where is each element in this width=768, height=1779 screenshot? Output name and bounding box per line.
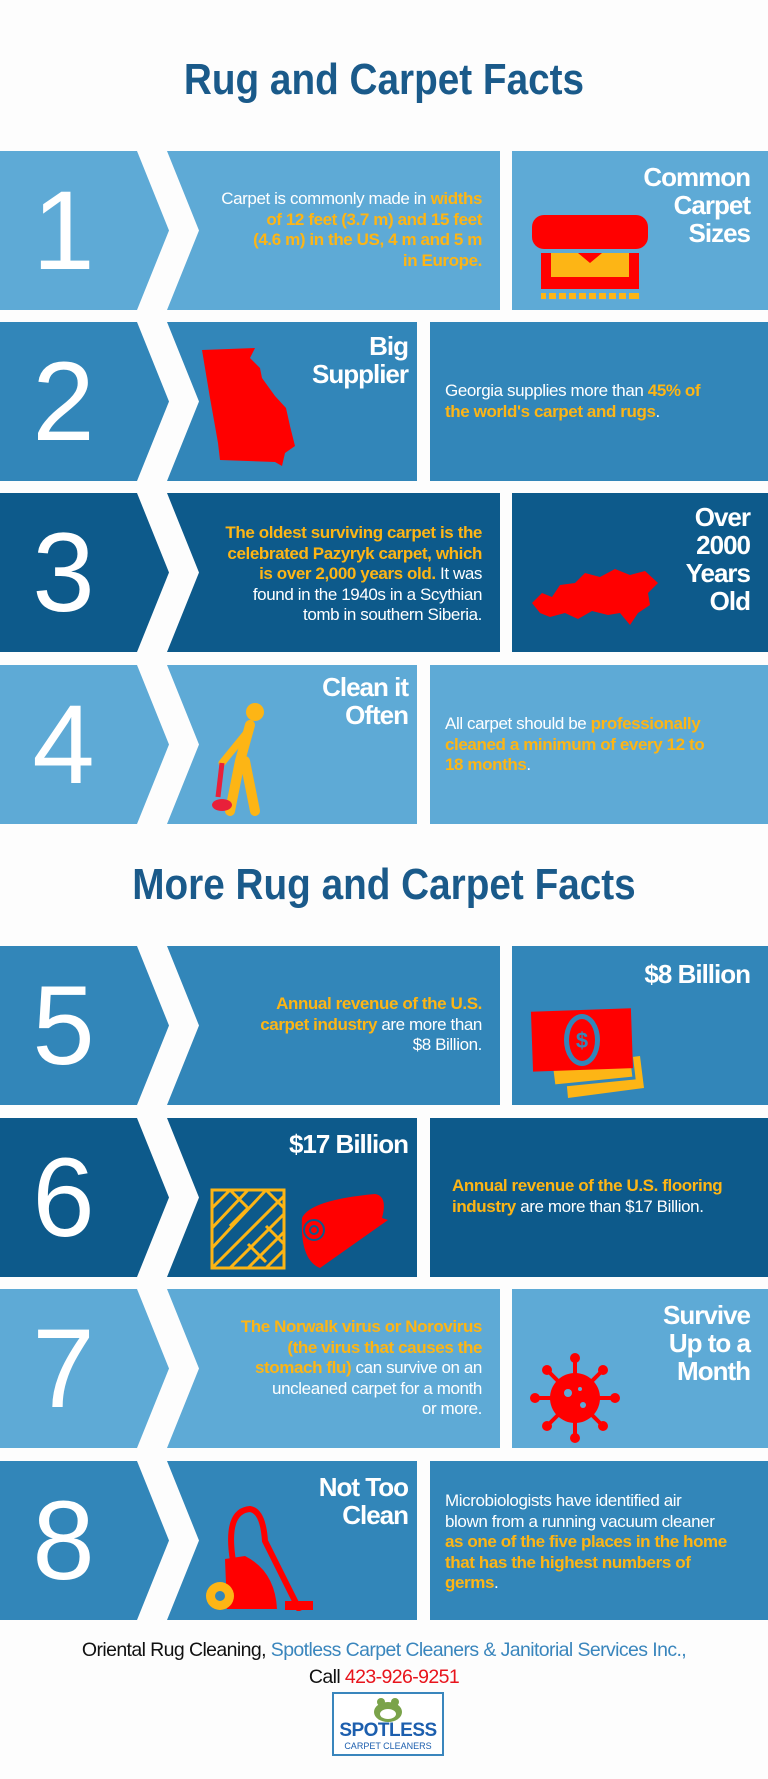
number 6: 6 (32, 1135, 95, 1260)
heading: over 2000 years old: 2000 (696, 530, 750, 560)
text 8: germs. (445, 1573, 498, 1592)
text 8: Microbiologists have identified air (445, 1491, 681, 1510)
row 2 (0, 322, 768, 481)
number 3: 3 (32, 510, 95, 635)
heading: over 2000 years old: Years (686, 558, 750, 588)
text 4: All carpet should be professionally (445, 714, 700, 733)
heading: big supplier (312, 331, 409, 389)
text 1: of 12 feet (3.7 m) and 15 feet (266, 210, 482, 228)
text 5: Annual revenue of the U.S. (276, 994, 482, 1013)
heading: $17 billion: $17 Billion (289, 1129, 408, 1159)
text 7: uncleaned carpet for a month (272, 1378, 482, 1398)
text 1 (221, 189, 482, 270)
row 1 (0, 151, 768, 310)
text 3: is over 2,000 years old. It was (259, 564, 482, 583)
heading: big supplier: Big (369, 331, 408, 361)
text 2: the world's carpet and rugs. (445, 402, 660, 420)
logo (332, 1692, 444, 1756)
text 7: or more. (422, 1399, 482, 1418)
icon: money: $ (576, 1028, 588, 1053)
footer text: Oriental Rug Cleaning, Spotless Carpet Cleaners & Janitorial Services Inc., (82, 1639, 686, 1661)
heading: common carpet sizes: Carpet (674, 190, 750, 220)
number 7: 7 (32, 1306, 95, 1431)
heading: survive up to a month: Month (677, 1356, 750, 1386)
logo: CARPET CLEANERS (344, 1741, 432, 1751)
text 7: The Norwalk virus or Norovirus (241, 1317, 482, 1336)
text 3: celebrated Pazyryk carpet, which (227, 544, 482, 562)
text 4: cleaned a minimum of every 12 to (445, 734, 704, 754)
heading: not too clean (319, 1472, 408, 1530)
text 7: (the virus that causes the (287, 1338, 482, 1356)
heading: common carpet sizes: Sizes (688, 218, 750, 248)
row 6 (0, 1118, 768, 1277)
heading: common carpet sizes (643, 162, 751, 248)
text 6: industry are more than $17 Billion. (452, 1196, 704, 1216)
text 1: (4.6 m) in the US, 4 m and 5 m (253, 230, 482, 249)
text 4 (445, 714, 704, 774)
footer text (82, 1639, 686, 1688)
number 8: 8 (32, 1478, 95, 1603)
heading: over 2000 years old: Over (695, 502, 750, 532)
heading: over 2000 years old: Old (710, 586, 750, 616)
row 7 (0, 1289, 768, 1448)
footer text: Call 423-926-9251 (309, 1666, 459, 1688)
text 5: carpet industry are more than (260, 1014, 482, 1034)
number 4: 4 (32, 682, 95, 807)
text 1: in Europe. (403, 250, 482, 270)
text 7: stomach flu) can survive on an (255, 1358, 482, 1377)
text 7 (241, 1317, 482, 1418)
row 3 (0, 493, 768, 652)
text 8: as one of the five places in the home (445, 1532, 727, 1551)
row 8 (0, 1461, 768, 1620)
heading: common carpet sizes: Common (643, 162, 750, 192)
row 5 (0, 946, 768, 1105)
text 2 (445, 381, 701, 420)
heading: clean it often: Clean it (322, 672, 408, 702)
heading: not too clean: Clean (342, 1500, 408, 1530)
text 3 (225, 523, 482, 624)
text 8: that has the highest numbers of (445, 1552, 690, 1572)
icon: vacuum cleaner (206, 1506, 313, 1611)
text 3: tomb in southern Siberia. (303, 605, 482, 624)
heading: not too clean: Not Too (319, 1472, 408, 1502)
logo: SPOTLESS (339, 1720, 437, 1741)
text 3: The oldest surviving carpet is the (225, 523, 482, 542)
icon: money (530, 1008, 644, 1098)
text 3: found in the 1940s in a Scythian (253, 584, 482, 604)
text 2: Georgia supplies more than 45% of (445, 381, 700, 400)
heading: $8 billion: $8 Billion (644, 959, 750, 989)
heading: survive up to a month (663, 1300, 752, 1386)
icon: carpet roll (532, 215, 648, 299)
text 6: Annual revenue of the U.S. flooring (452, 1176, 722, 1195)
title 2: More Rug and Carpet Facts (132, 860, 636, 909)
title: Rug and Carpet Facts (184, 55, 584, 104)
number 5: 5 (32, 963, 95, 1088)
text 1: Carpet is commonly made in widths (221, 189, 482, 208)
heading: survive up to a month: Up to a (669, 1328, 750, 1358)
text 5: $8 Billion. (413, 1035, 482, 1054)
icon: person vacuuming (212, 703, 264, 816)
row 4 (0, 665, 768, 824)
icon: georgia map (202, 348, 295, 466)
number 1: 1 (32, 168, 95, 293)
heading: big supplier: Supplier (312, 359, 408, 389)
text 4: 18 months. (445, 755, 531, 774)
text 8: blown from a running vacuum cleaner (445, 1512, 714, 1530)
text 6 (452, 1176, 722, 1216)
heading: clean it often (322, 672, 409, 730)
icon: parquet and rug roll (210, 1188, 388, 1270)
text 5 (260, 994, 482, 1054)
heading: over 2000 years old (686, 502, 751, 616)
number 2: 2 (32, 339, 95, 464)
heading: clean it often: Often (345, 700, 408, 730)
icon: russia map (532, 569, 658, 625)
heading: survive up to a month: Survive (663, 1300, 750, 1330)
text 8 (445, 1491, 727, 1592)
icon: virus (530, 1353, 620, 1443)
